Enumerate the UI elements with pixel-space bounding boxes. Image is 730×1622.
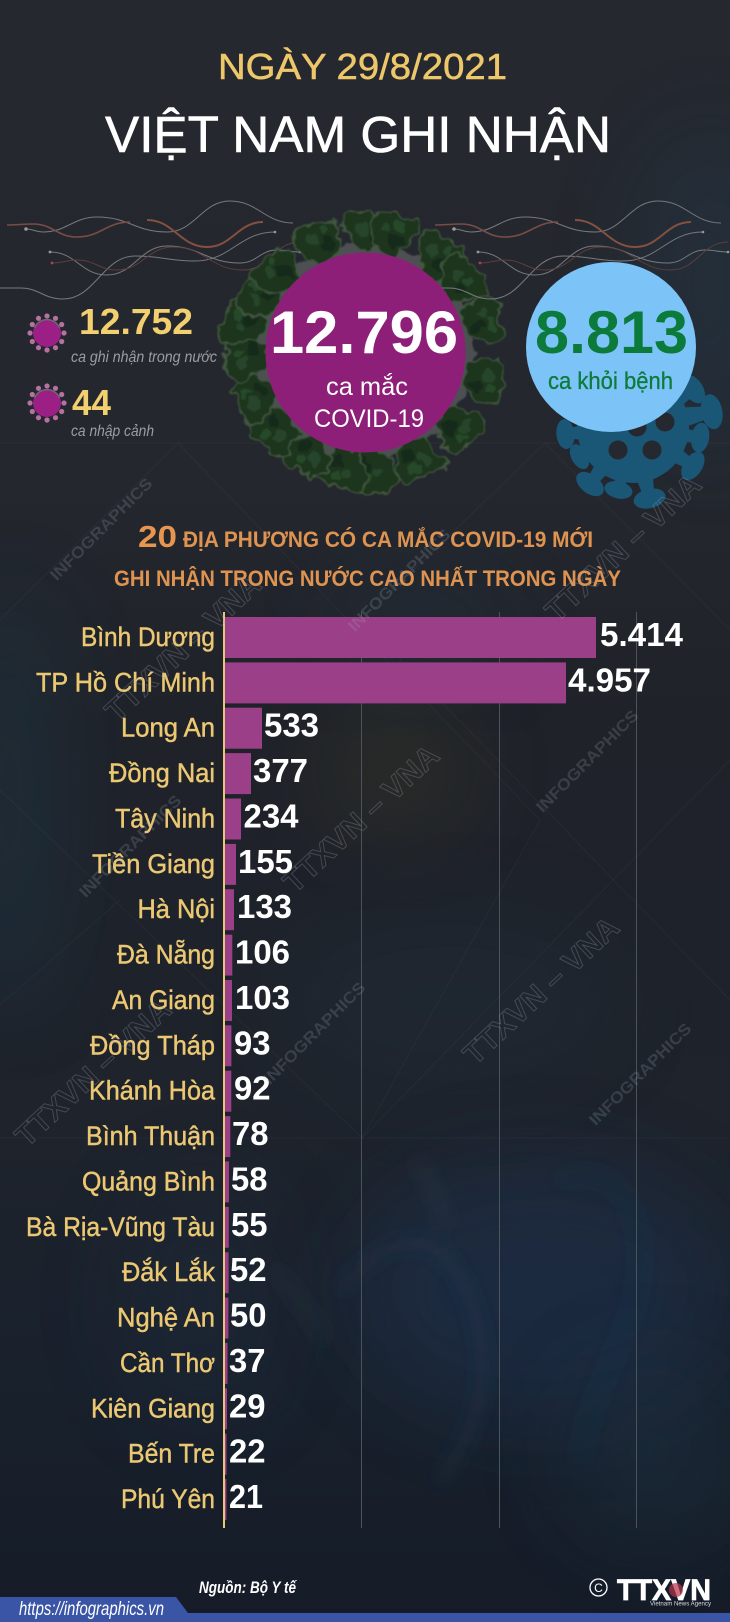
watermarks: INFOGRAPHICS (345, 526, 455, 635)
row: Tiền Giang: Tiền Giang (92, 849, 215, 879)
row: Đà Nẵng: Đà Nẵng (117, 939, 215, 970)
row: Tây Ninh: Tây Ninh (115, 804, 215, 834)
stat: imported cases: ca nhập cảnh (71, 423, 154, 440)
chart heading: ĐỊA PHƯƠNG CÓ CA MẮC COVID-19 MỚI (183, 527, 593, 552)
row: Khánh Hòa (89, 1070, 270, 1112)
watermarks: INFOGRAPHICS (47, 475, 157, 584)
row: Đồng Nai: 377 (253, 752, 308, 789)
row: Long An: 533 (264, 707, 319, 744)
title: main: VIỆT NAM GHI NHẬN (105, 106, 611, 163)
watermarks: INFOGRAPHICS (533, 707, 643, 816)
row: Đắk Lắk: Đắk Lắk (122, 1256, 215, 1287)
decorative wave lines: left (0, 201, 301, 299)
circle: total cases (266, 252, 466, 452)
row: Kiên Giang: 29 (229, 1387, 266, 1424)
circle: recovered: ca khỏi bệnh (548, 368, 673, 395)
row: Bình Dương (81, 616, 684, 658)
footer band (0, 1597, 730, 1622)
row: Tiền Giang (92, 843, 293, 885)
row: Kiên Giang: Kiên Giang (91, 1393, 215, 1423)
row: Nghệ An: Nghệ An (117, 1303, 215, 1333)
circle: total cases: 12.796 (270, 299, 458, 366)
watermarks: INFOGRAPHICS (586, 1020, 696, 1129)
row: Bình Thuận: Bình Thuận (86, 1121, 215, 1151)
row: Hà Nội: Hà Nội (138, 894, 215, 924)
row: Quảng Bình: 58 (231, 1160, 268, 1197)
circle: total cases: ca mắc (326, 372, 408, 401)
watermarks: INFOGRAPHICS (76, 792, 186, 901)
chart gridlines (362, 612, 636, 1528)
row: Đà Nẵng: 106 (235, 934, 290, 971)
row: Long An: Long An (121, 713, 215, 743)
chart heading: GHI NHẬN TRONG NƯỚC CAO NHẤT TRONG NGÀY (114, 566, 621, 591)
row: Phú Yên (121, 1478, 263, 1520)
icon: blue virus (555, 371, 726, 512)
stat: imported cases (27, 382, 154, 440)
row: Bình Thuận: 78 (232, 1115, 268, 1152)
row: Bà Rịa-Vũng Tàu: Bà Rịa-Vũng Tàu (26, 1212, 215, 1242)
logo: TTXVN: TTXVN (617, 1574, 711, 1607)
row: Quảng Bình: Quảng Bình (82, 1166, 215, 1196)
row: TP Hồ Chí Minh (36, 661, 651, 703)
row: Phú Yên: Phú Yên (121, 1484, 215, 1514)
chart heading (114, 519, 621, 591)
title: date: NGÀY 29/8/2021 (218, 46, 507, 87)
row: Cần Thơ (120, 1342, 266, 1384)
circle: total cases: COVID-19 (314, 405, 424, 433)
row: An Giang: An Giang (112, 985, 215, 1015)
row: Nghệ An: 50 (230, 1297, 266, 1334)
row: Bình Dương: Bình Dương (81, 622, 215, 652)
watermarks: TTXVN – VNA (277, 739, 446, 899)
row: Nghệ An (117, 1297, 266, 1339)
watermarks: TTXVN – VNA (457, 911, 626, 1071)
source note: Nguồn: Bộ Y tế (199, 1578, 297, 1597)
watermarks: TTXVN – VNA (9, 993, 178, 1153)
row: Bến Tre (128, 1433, 266, 1475)
row: An Giang: 103 (235, 979, 290, 1016)
chart heading: 20 (138, 519, 177, 554)
row: Quảng Bình (82, 1160, 268, 1202)
watermarks: INFOGRAPHICS (260, 979, 370, 1088)
row: Tây Ninh (115, 798, 299, 840)
row: Đồng Nai: Đồng Nai (109, 758, 215, 788)
footer band: https://infographics.vn (19, 1599, 164, 1620)
row: Đồng Tháp: 93 (234, 1024, 270, 1061)
row: Cần Thơ: Cần Thơ (120, 1348, 215, 1378)
row: Tây Ninh: 234 (244, 798, 299, 834)
stat: imported cases: 44 (72, 382, 111, 423)
logo: TTXVN: Vietnam News Agency (650, 1600, 712, 1608)
row: An Giang (112, 979, 290, 1021)
row: Bến Tre: Bến Tre (128, 1439, 215, 1469)
row: Cần Thơ: 37 (229, 1342, 266, 1379)
icon: large green virus (218, 207, 509, 494)
row: Đắk Lắk: 52 (230, 1251, 266, 1288)
row: Khánh Hòa: 92 (234, 1070, 270, 1107)
row: Bà Rịa-Vũng Tàu (26, 1206, 268, 1248)
circle: recovered (526, 262, 696, 432)
stat: domestic cases (27, 301, 217, 366)
row: Kiên Giang (91, 1387, 266, 1429)
row: Hà Nội: 133 (237, 888, 292, 925)
watermarks (9, 468, 708, 1153)
stat: domestic cases: 12.752 (79, 301, 193, 342)
watermarks: TTXVN – VNA (99, 568, 268, 728)
decorative wave lines: right (428, 201, 729, 299)
logo: TTXVN: C (594, 1581, 603, 1595)
row: Bình Thuận (86, 1115, 268, 1157)
row: TP Hồ Chí Minh: 4.957 (568, 661, 651, 698)
row: Bến Tre: 22 (229, 1433, 266, 1470)
row: Khánh Hòa: Khánh Hòa (89, 1076, 216, 1106)
row: Hà Nội (138, 888, 292, 930)
row: Long An (121, 707, 319, 749)
watermarks: TTXVN – VNA (539, 468, 708, 628)
row: Bình Dương: 5.414 (600, 616, 684, 653)
row: Tiền Giang: 155 (238, 843, 293, 880)
row: Đắk Lắk (122, 1251, 266, 1293)
row: Đồng Tháp: Đồng Tháp (90, 1030, 215, 1060)
chart axis (223, 612, 225, 1528)
stat: domestic cases: ca ghi nhận trong nước (71, 349, 217, 366)
row: Đồng Nai (109, 752, 308, 794)
row: Bà Rịa-Vũng Tàu: 55 (231, 1206, 268, 1243)
row: Đà Nẵng (117, 934, 290, 976)
row: Đồng Tháp (90, 1024, 270, 1066)
row: TP Hồ Chí Minh: TP Hồ Chí Minh (36, 667, 215, 697)
row: Phú Yên: 21 (229, 1478, 263, 1515)
circle: recovered: 8.813 (535, 299, 688, 366)
